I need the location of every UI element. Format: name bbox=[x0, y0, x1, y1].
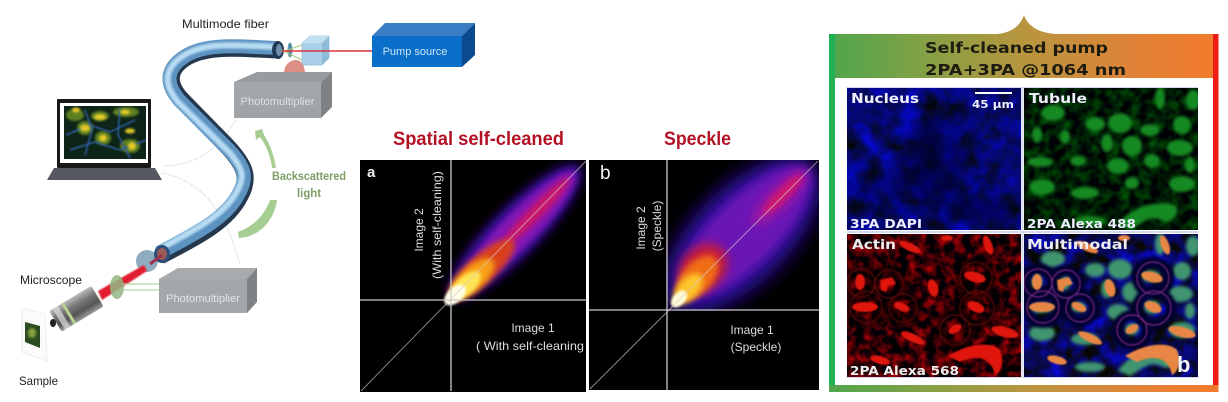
pump source box bbox=[372, 23, 475, 67]
lower photomultiplier: Photomultiplier bbox=[166, 293, 240, 305]
focused red beam bbox=[98, 265, 147, 300]
image: tubule: Tubule bbox=[1029, 91, 1087, 107]
image separators bbox=[846, 87, 1198, 378]
density cloud a bbox=[441, 160, 586, 308]
frame heading bbox=[925, 39, 1126, 79]
image: actin: Actin bbox=[852, 237, 896, 253]
lower photomultiplier bbox=[159, 268, 257, 313]
panel letter b: b bbox=[600, 163, 611, 184]
scale bar bbox=[972, 92, 1014, 111]
scale bar: 45 µm bbox=[972, 99, 1014, 111]
axis label: image 1 a bbox=[476, 321, 584, 353]
panel: self-cleaned pump microscopy bbox=[829, 15, 1218, 392]
axis label: image 2 a: Image 2 bbox=[412, 208, 426, 252]
image: actin: 2PA Alexa 568 bbox=[850, 364, 959, 378]
upper photomultiplier bbox=[234, 72, 332, 118]
pump source box: Pump source bbox=[383, 46, 447, 58]
panel: optical setup bbox=[19, 17, 475, 388]
density cloud b bbox=[666, 160, 819, 311]
label: backscattered light: Backscattered bbox=[272, 169, 346, 183]
chart: scatter density a bbox=[360, 150, 597, 392]
image: multimodal: b bbox=[1177, 352, 1190, 377]
axis label: image 2 b: Image 2 bbox=[634, 206, 648, 250]
label: microscope: Microscope bbox=[20, 273, 82, 287]
image: tubule: 2PA Alexa 488 bbox=[1027, 217, 1136, 231]
label: sample: Sample bbox=[19, 374, 58, 388]
multimode fiber bbox=[158, 45, 278, 256]
fiber input coupler bbox=[272, 41, 292, 59]
image: actin bbox=[847, 234, 1021, 378]
axis label: image 2 b: (Speckle) bbox=[650, 201, 664, 251]
heading: spatial self-cleaned: Spatial self-cleaned bbox=[393, 129, 564, 150]
microscope objective bbox=[49, 286, 104, 332]
thin signal paths bbox=[161, 120, 240, 265]
axis label: image 1 b: Image 1 bbox=[730, 323, 774, 337]
laptop with image bbox=[47, 99, 162, 180]
image: multimodal bbox=[1024, 233, 1200, 377]
frame heading: Self-cleaned pump bbox=[925, 39, 1108, 57]
heading: speckle: Speckle bbox=[664, 129, 731, 150]
green collection path bbox=[123, 284, 159, 290]
gradient frame bbox=[829, 15, 1218, 392]
backscattered light arrow bbox=[238, 129, 277, 238]
beam splitter cube bbox=[282, 36, 329, 65]
axes b bbox=[589, 160, 819, 390]
green lens bbox=[110, 275, 124, 299]
frame heading: 2PA+3PA @1064 nm bbox=[925, 61, 1126, 79]
upper photomultiplier: Photomultiplier bbox=[240, 96, 315, 108]
label: backscattered light bbox=[266, 168, 352, 200]
dichroic dome bbox=[284, 60, 305, 72]
axis label: image 1 a: ( With self-cleaning bbox=[476, 339, 584, 353]
axes a bbox=[360, 160, 586, 391]
axis label: image 1 b: (Speckle) bbox=[731, 340, 781, 354]
image: nucleus: 3PA DAPI bbox=[850, 217, 922, 231]
axis label: image 2 b bbox=[634, 201, 664, 251]
image: nucleus bbox=[847, 88, 1021, 231]
axis label: image 2 a bbox=[412, 171, 444, 279]
lower fiber coupler bbox=[136, 245, 170, 272]
panel letter a: a bbox=[367, 164, 376, 181]
red pump beam bbox=[282, 50, 373, 52]
axis label: image 1 a: Image 1 bbox=[511, 321, 555, 335]
label: multimode fiber: Multimode fiber bbox=[182, 17, 269, 31]
axis label: image 2 a: (With self-cleaning) bbox=[430, 171, 444, 279]
sample slide bbox=[22, 308, 47, 361]
image: tubule bbox=[1024, 87, 1200, 231]
axis label: image 1 b bbox=[730, 323, 781, 354]
image: nucleus: Nucleus bbox=[851, 91, 919, 107]
label: backscattered light: light bbox=[297, 186, 321, 200]
chart: scatter density b bbox=[589, 160, 819, 390]
image: multimodal: Multimodal bbox=[1027, 237, 1128, 253]
